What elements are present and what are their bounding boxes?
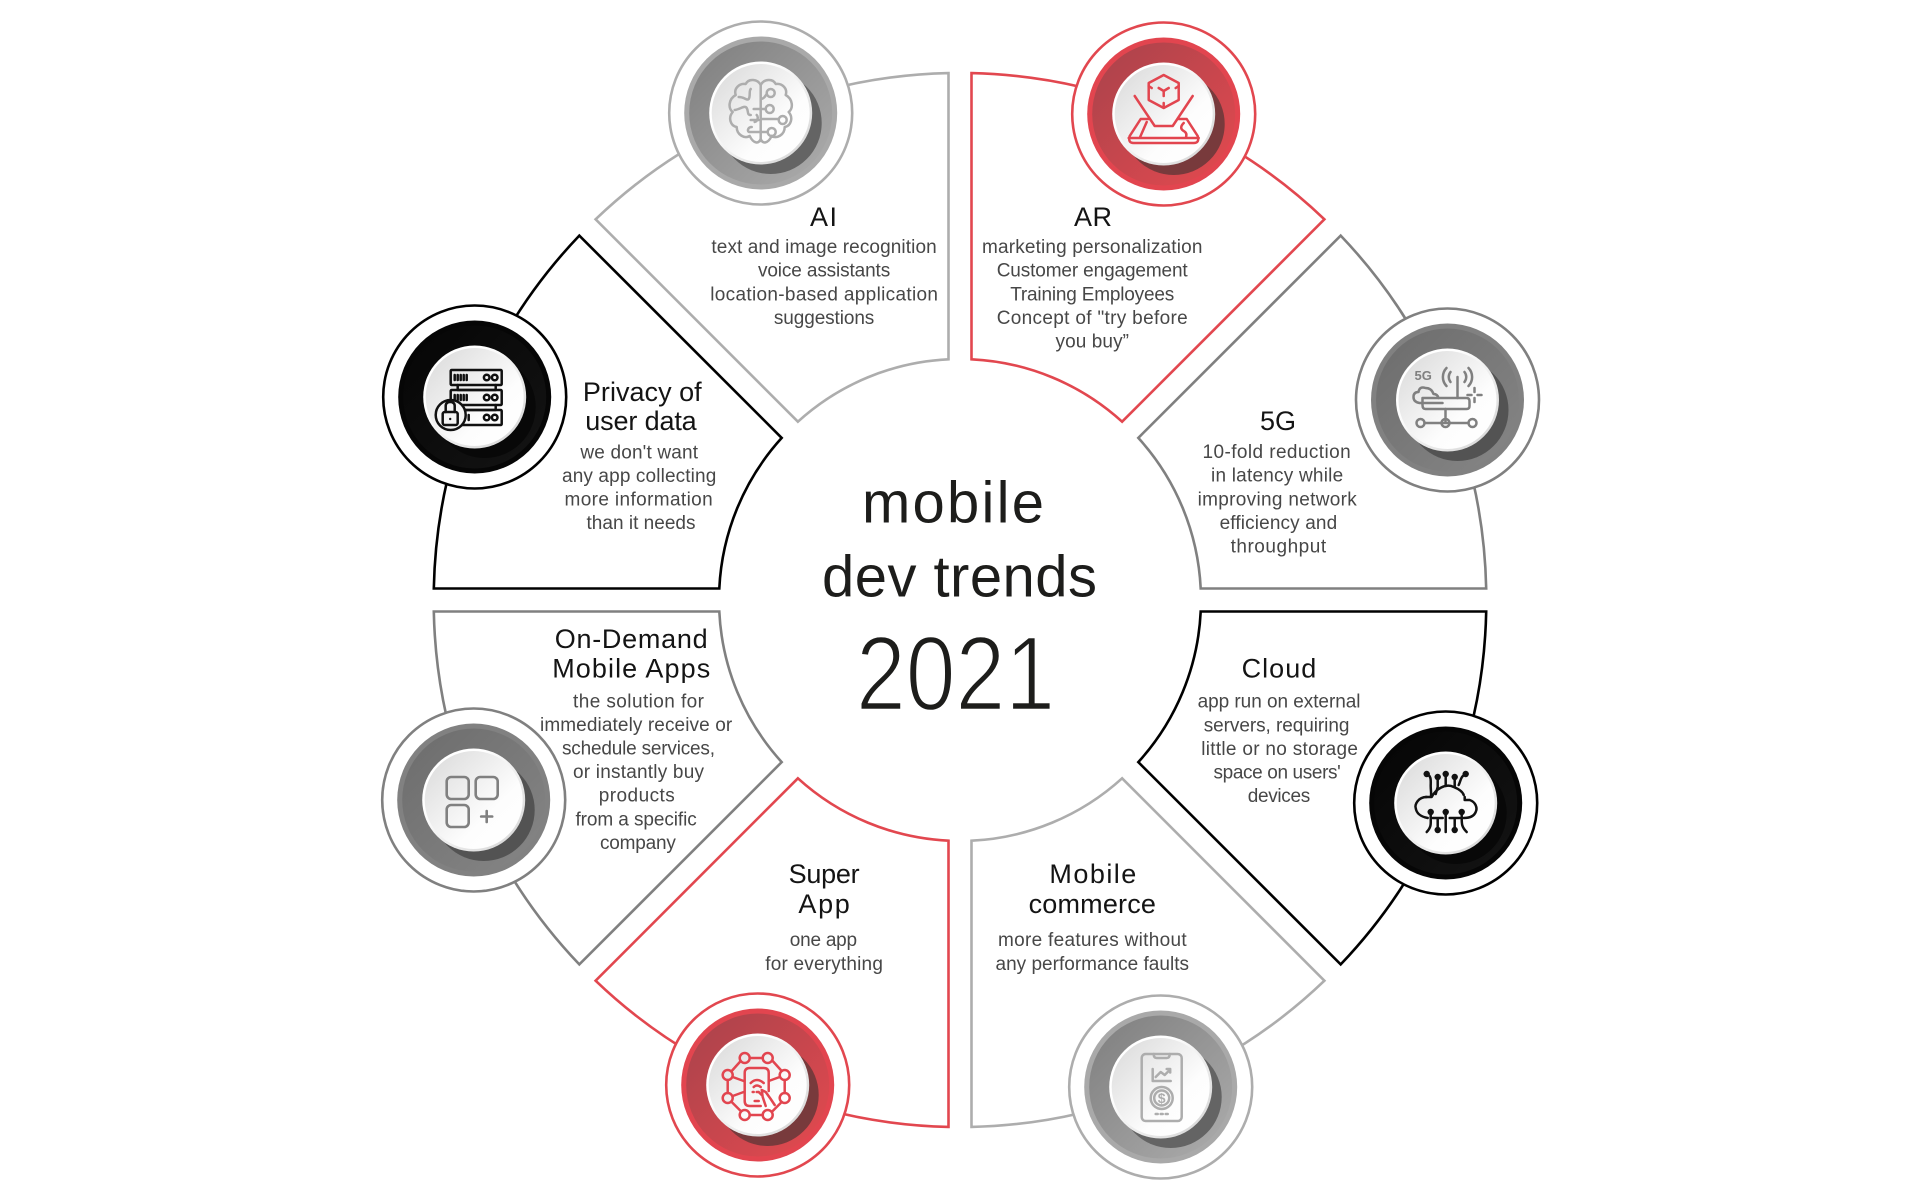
text block: AI: location-based application bbox=[710, 284, 938, 305]
icon: super app network badge bbox=[666, 994, 849, 1176]
text block: AR: Customer engagement bbox=[997, 261, 1188, 282]
text block: Cloud: devices bbox=[1248, 786, 1310, 807]
text block: On-Demand: from a specific bbox=[576, 809, 697, 830]
heading: On-Demand Mobile Apps: Mobile Apps bbox=[552, 654, 710, 684]
icon: app grid badge bbox=[382, 708, 565, 892]
text block: AR bbox=[982, 237, 1202, 353]
panel outline: On-Demand bbox=[434, 612, 782, 964]
text block: On-Demand: the solution for bbox=[573, 692, 705, 713]
text block: AR: Training Employees bbox=[1010, 284, 1174, 305]
panel: 5G bbox=[1138, 236, 1539, 588]
heading: AI: AI bbox=[810, 202, 837, 232]
heading: Super App: App bbox=[798, 889, 850, 919]
heading: Privacy of user data: user data bbox=[585, 406, 698, 436]
text block: 5G bbox=[1198, 442, 1357, 558]
text block: Mobile commerce bbox=[996, 930, 1189, 975]
text block: Privacy: more information bbox=[564, 490, 713, 511]
text block: On-Demand: schedule services, bbox=[562, 739, 715, 760]
panel outline: 5G bbox=[1138, 236, 1486, 588]
text block: AI bbox=[710, 237, 938, 329]
text block: 5G: efficiency and bbox=[1220, 513, 1337, 534]
title: mobile dev trends 2021: dev trends bbox=[822, 544, 1097, 610]
text block: AI: text and image recognition bbox=[711, 237, 937, 258]
heading: Privacy of user data: Privacy of bbox=[583, 377, 702, 407]
text block: AI: suggestions bbox=[774, 308, 874, 329]
text block: Cloud bbox=[1198, 692, 1360, 807]
panel outline: Cloud bbox=[1138, 612, 1486, 964]
panel outline: AR bbox=[972, 73, 1324, 422]
heading: Mobile commerce: commerce bbox=[1029, 889, 1156, 919]
panel outline: Privacy bbox=[434, 236, 782, 588]
icon: 5G router badge: 5G bbox=[1414, 368, 1432, 383]
text block: On-Demand: or instantly buy bbox=[573, 762, 704, 783]
text block: 5G: in latency while bbox=[1211, 466, 1343, 487]
heading: Super App bbox=[789, 859, 860, 919]
heading: On-Demand Mobile Apps bbox=[552, 624, 710, 684]
panel: Mobile commerce bbox=[972, 778, 1324, 1178]
icon: cloud circuit badge bbox=[1354, 712, 1537, 894]
text block: Mobile commerce: any performance faults bbox=[996, 954, 1189, 975]
heading: Mobile commerce bbox=[1029, 859, 1156, 919]
panel: AI bbox=[596, 22, 948, 422]
icon: mobile payment badge: $ bbox=[1158, 1090, 1166, 1106]
title: mobile dev trends 2021 bbox=[822, 470, 1097, 733]
text block: Cloud: servers, requiring bbox=[1204, 715, 1349, 736]
text block: Privacy: than it needs bbox=[586, 513, 696, 534]
text block: Super App: for everything bbox=[765, 954, 883, 975]
heading: Privacy of user data bbox=[583, 377, 702, 436]
text block: Mobile commerce: more features without bbox=[998, 930, 1187, 951]
text block: Privacy: any app collecting bbox=[562, 466, 716, 487]
text block: 5G: throughput bbox=[1231, 537, 1327, 558]
text block: On-Demand bbox=[540, 692, 733, 854]
title: mobile dev trends 2021: 2021 bbox=[856, 615, 1055, 733]
heading: Super App: Super bbox=[789, 859, 860, 889]
text block: AR: marketing personalization bbox=[982, 237, 1202, 258]
panel: Cloud bbox=[1138, 612, 1537, 964]
icon: AR hologram badge bbox=[1072, 22, 1255, 206]
text block: Privacy: we don't want bbox=[579, 442, 699, 464]
text block: 5G: 10-fold reduction bbox=[1202, 442, 1351, 463]
text block: Cloud: app run on external bbox=[1198, 692, 1360, 713]
heading: 5G: 5G bbox=[1260, 406, 1296, 436]
panel: Privacy of user data bbox=[383, 236, 782, 588]
text block: Super App: one app bbox=[790, 930, 857, 951]
title: mobile dev trends 2021: mobile bbox=[862, 470, 1044, 536]
text block: Cloud: little or no storage bbox=[1201, 739, 1358, 760]
panel outline: Mobile commerce bbox=[972, 778, 1324, 1127]
panel outline: AI bbox=[596, 73, 948, 422]
text block: On-Demand: immediately receive or bbox=[540, 715, 733, 736]
icon: mobile payment badge bbox=[1069, 996, 1252, 1178]
panel: On-Demand Mobile Apps bbox=[382, 612, 782, 964]
icon: AI brain badge bbox=[669, 22, 852, 204]
text block: Super App bbox=[765, 930, 883, 975]
text block: AI: voice assistants bbox=[758, 261, 890, 282]
heading: Cloud: Cloud bbox=[1242, 654, 1316, 684]
text block: AR: you buy” bbox=[1056, 332, 1129, 353]
text block: On-Demand: products bbox=[599, 786, 675, 807]
text block: AR: Concept of "try before bbox=[997, 308, 1188, 329]
icon: 5G router badge bbox=[1356, 308, 1539, 492]
panel: AR bbox=[972, 22, 1324, 422]
heading: AR: AR bbox=[1074, 202, 1112, 232]
panel: Super App bbox=[596, 778, 948, 1176]
heading: Mobile commerce: Mobile bbox=[1049, 859, 1136, 889]
text block: 5G: improving network bbox=[1198, 489, 1357, 510]
text block: Cloud: space on users' bbox=[1214, 762, 1341, 784]
text block: On-Demand: company bbox=[600, 833, 676, 854]
icon: secure server badge bbox=[383, 306, 566, 488]
text block: Privacy bbox=[562, 442, 716, 534]
heading: On-Demand Mobile Apps: On-Demand bbox=[555, 624, 708, 654]
panel outline: Super App bbox=[596, 778, 948, 1127]
